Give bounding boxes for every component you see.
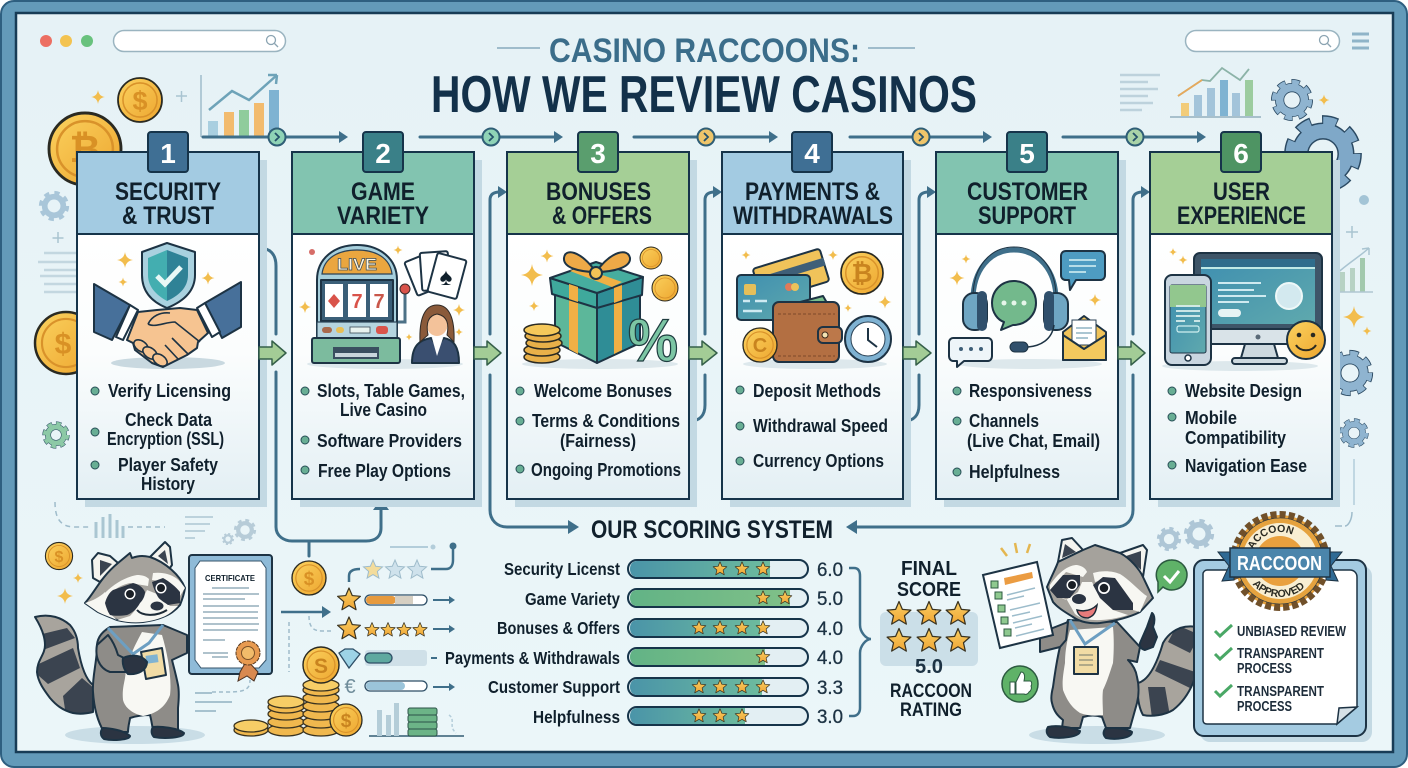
bullets 2: Software Providers [317, 431, 462, 451]
bullets 5: Helpfulness [969, 462, 1060, 482]
bullets 4: Currency Options [753, 451, 884, 471]
heading 6: USER [1213, 178, 1270, 206]
icon: slot machine, cards and dealer: 7 [351, 291, 363, 313]
decor: sparkles and coin left of raccoon [45, 542, 83, 604]
title: HOW WE REVIEW CASINOS [431, 66, 977, 124]
final score block [880, 558, 978, 721]
number badge 1 [148, 132, 188, 172]
panel: 1 security and trust [77, 132, 267, 507]
final score block: RACCOON [890, 681, 972, 702]
row: security [504, 559, 843, 581]
browser controls: right [1186, 30, 1369, 52]
panel: 4 payments and withdrawals [722, 132, 911, 507]
number badge 6: 6 [1233, 138, 1249, 169]
bullets 2: Free Play Options [318, 461, 451, 481]
decor: left column: $ [55, 328, 72, 361]
row: payments: 4.0 [817, 648, 843, 669]
checklist text: TRANSPARENT [1237, 684, 1324, 700]
heading 5: CUSTOMER [967, 178, 1088, 206]
number badge 6 [1221, 132, 1261, 172]
bullets 6: Website Design [1185, 381, 1302, 401]
heading 3: & OFFERS [552, 202, 652, 230]
decor: left column [35, 193, 255, 544]
icon: coin, bars and stacks [195, 561, 362, 736]
connectors between cards and scoring [259, 186, 1150, 556]
number badge 5: 5 [1019, 138, 1035, 169]
certificate [189, 555, 272, 681]
row: customer support [488, 677, 843, 699]
panel: 6 user experience [1150, 132, 1340, 507]
icon: headset and chat bubbles [949, 247, 1106, 369]
icon: slot machine, cards and dealer: 7 [373, 291, 385, 313]
row: security: 6.0 [817, 560, 843, 581]
icon: gift box, coins and percent: % [628, 307, 678, 374]
decor: gears and badges near right raccoon [1001, 512, 1352, 702]
bullets 5 [953, 381, 1100, 482]
seal badge: RACCOON [1237, 553, 1322, 575]
seal badge: APPROVED [1252, 581, 1304, 598]
bullets 5: Responsiveness [969, 381, 1092, 401]
brace to final score [849, 568, 871, 716]
icon: wallet, cards, coins and clock [737, 249, 892, 369]
icon: right raccoon with checklist [983, 538, 1207, 744]
bullets 4: Deposit Methods [753, 381, 881, 401]
row: bonuses: Bonuses & Offers [497, 618, 620, 638]
bullets 1: Check Data [125, 410, 213, 430]
final score block: 5.0 [915, 656, 943, 678]
bullets 5: (Live Chat, Email) [967, 431, 1100, 451]
heading 3 [546, 178, 652, 230]
row: bonuses: 4.0 [817, 619, 843, 640]
icon: shield and handshake [94, 243, 241, 369]
checklist text: TRANSPARENT [1237, 646, 1324, 662]
decor: top left coins and chart: $ [132, 86, 148, 116]
bullets 2 [301, 381, 465, 481]
callout: raccoon approved panel [1193, 511, 1372, 742]
heading 1: SECURITY [115, 178, 221, 206]
heading 6 [1177, 178, 1306, 230]
final score block: RATING [900, 700, 962, 721]
heading 2 [337, 178, 429, 230]
bullets 1: Player Safety [118, 455, 218, 475]
bullets 2: Live Casino [340, 400, 427, 420]
icon: slot machine, cards and dealer [299, 245, 467, 369]
final score block: SCORE [897, 579, 961, 601]
row: helpfulness [533, 707, 843, 728]
checklist text [1215, 624, 1346, 715]
row: customer support: Customer Support [488, 677, 620, 697]
bullets 2: Slots, Table Games, [317, 381, 465, 401]
number badge 3 [578, 132, 618, 172]
certificate: CERTIFICATE [205, 573, 255, 583]
heading 4 [733, 178, 893, 230]
bullets 6 [1168, 381, 1307, 476]
checklist [983, 562, 1053, 648]
bullets 3: Ongoing Promotions [531, 460, 681, 480]
row: bonuses [497, 618, 843, 640]
icon: monitor, phone and smiley [1162, 248, 1325, 371]
panel: 2 game variety [292, 132, 482, 507]
checklist text: UNBIASED REVIEW [1237, 624, 1346, 640]
title [431, 32, 977, 124]
panel: 3 bonuses and offers [507, 132, 697, 507]
small ratings column [338, 542, 464, 736]
bullets 5: Channels [969, 411, 1039, 431]
icon: left raccoon with certificate [30, 542, 272, 744]
row: payments: Payments & Withdrawals [445, 648, 620, 668]
panel: 5 customer support [936, 132, 1126, 507]
bullets 1: Verify Licensing [108, 381, 231, 401]
icon: coin, bars and stacks: S [314, 655, 328, 678]
bullets 3: Terms & Conditions [532, 411, 680, 431]
flow arrows across the top [203, 128, 1206, 146]
heading 6: EXPERIENCE [1177, 202, 1306, 230]
seal badge: RACCOON [1248, 524, 1294, 548]
heading 3: BONUSES [546, 178, 651, 206]
icon: wallet, cards, coins and clock: ₿ [851, 258, 873, 288]
number badge 4 [792, 132, 832, 172]
small ratings column: € [344, 676, 356, 698]
number badge 2: 2 [375, 138, 391, 169]
icon: gift box, coins and percent [521, 247, 678, 374]
decor: top left coins and chart [49, 75, 279, 185]
bullets 4 [736, 381, 888, 471]
row: game variety: Game Variety [525, 589, 620, 609]
number badge 2 [363, 132, 403, 172]
row: helpfulness: Helpfulness [533, 707, 620, 727]
row: game variety [525, 589, 843, 610]
bullets 6: Compatibility [1185, 428, 1286, 448]
icon: slot machine, cards and dealer: ♠ [440, 264, 453, 291]
heading 4: PAYMENTS & [745, 178, 880, 206]
decor: top left coins and chart: ₿ [70, 129, 100, 171]
bullets 4: Withdrawal Speed [753, 416, 888, 436]
bullets 1 [91, 381, 231, 494]
row: helpfulness: 3.0 [817, 707, 843, 728]
row: security: Security Licenst [504, 559, 620, 579]
decor: sparkles and coin left of raccoon: $ [55, 549, 64, 566]
chart: score bars [445, 559, 843, 728]
heading 4: WITHDRAWALS [733, 202, 893, 230]
number badge 5 [1007, 132, 1047, 172]
title: CASINO RACCOONS: [549, 32, 860, 70]
heading 5: SUPPORT [978, 202, 1076, 230]
number badge 1: 1 [160, 138, 176, 169]
number badge 3: 3 [590, 138, 606, 169]
bullets 3: Welcome Bonuses [534, 381, 672, 401]
row: game variety: 5.0 [817, 589, 843, 610]
decor: top right charts and gears [1120, 68, 1373, 505]
heading 1 [115, 178, 221, 230]
heading 2: GAME [351, 178, 415, 206]
bullets 6: Navigation Ease [1185, 456, 1307, 476]
heading 2: VARIETY [337, 202, 429, 230]
arrows: green step arrows [259, 341, 1145, 365]
heading 1: & TRUST [122, 202, 214, 230]
number badge 4: 4 [804, 138, 820, 169]
icon: slot machine, cards and dealer: LIVE [337, 255, 377, 274]
seal badge [1217, 511, 1343, 611]
browser controls: left [40, 30, 286, 52]
bullets 3 [516, 381, 681, 480]
heading: our scoring system: OUR SCORING SYSTEM [591, 516, 833, 544]
bullets 1: History [141, 474, 195, 494]
checklist text: PROCESS [1237, 699, 1292, 715]
row: customer support: 3.3 [817, 678, 843, 699]
final score block: FINAL [901, 558, 957, 580]
bullets 6: Mobile [1185, 408, 1237, 428]
icon: coin, bars and stacks: $ [304, 569, 315, 590]
heading 5 [967, 178, 1088, 230]
icon: wallet, cards, coins and clock: C [753, 335, 767, 357]
bullets 3: (Fairness) [560, 431, 636, 451]
icon: coin, bars and stacks: $ [341, 711, 352, 732]
bullets 1: Encryption (SSL) [107, 429, 224, 449]
checklist text: PROCESS [1237, 661, 1292, 677]
row: payments [445, 648, 843, 669]
